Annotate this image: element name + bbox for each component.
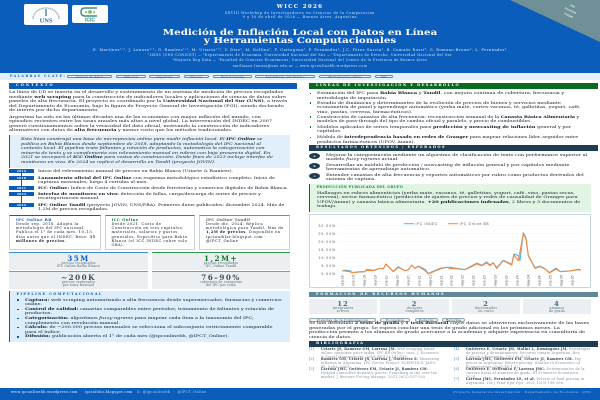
stat: integrantes: Integrantes bbox=[332, 306, 354, 310]
panel: contexto heading: CONTEXTO bbox=[16, 83, 54, 87]
callout: IPC Online: contexto local. El pipeline trata faltantes y rotación de productos, automatiza la categorización con bbox=[20, 145, 264, 150]
panel: formación de recursos humanos heading bbox=[309, 292, 598, 297]
card: IPC Online Tandil: ipctandilar.blogspot.com · bbox=[206, 235, 266, 239]
timeline 2014 bbox=[9, 169, 34, 173]
list: líneas de investigación: Módulo de interdependencia basado en redes de Granger para mapear relaciones líder–seguidor entre bbox=[317, 134, 578, 139]
logo: UNS bbox=[24, 4, 68, 25]
stat: 200K: ~200K bbox=[61, 273, 96, 282]
line chart: IPC INDEC vs IPC Online BB: may-20 bbox=[396, 274, 400, 286]
corner ribbon: Provincia bbox=[564, 6, 577, 15]
title: Medición de Inflación Local con Datos en Línea bbox=[163, 28, 437, 38]
panel: resultados heading: RESULTADOS OBTENIDOS / ESPERADOS bbox=[316, 145, 446, 149]
line chart: IPC INDEC vs IPC Online BB bbox=[309, 214, 591, 288]
bibliography right column: de precios y determinantes: Sectores tomate Argentina. Rev. bbox=[466, 351, 580, 355]
corner ribbon: Ciudad bbox=[563, 11, 574, 19]
footer bbox=[0, 388, 600, 400]
panel: bibliografía heading: BIBLIOGRAFÍA bbox=[316, 341, 364, 345]
results list: Mejorar la categorización mediante un algoritmo de clasificación de texto con performance superior al bbox=[326, 152, 587, 157]
bibliography right column: Larrosa JMC, Fernández LE, et al. Drivers of food pricing in bbox=[466, 377, 584, 381]
panel: producción publicada bbox=[309, 184, 591, 212]
list: líneas de investigación: Estimación del IPC para Bahía Blanca y Tandil, con mejora continua de cobertura, frecuencia y bbox=[317, 90, 564, 95]
text: [4] bbox=[454, 347, 459, 351]
line chart: IPC INDEC vs IPC Online BB: sep-22 bbox=[472, 275, 476, 285]
keyword pills: Precios bbox=[190, 75, 203, 79]
stat: alumnos: 4 bbox=[554, 300, 560, 308]
affiliations: ⁴Mayoría Reg Data — ⁵Facultad de Ciencias Económicas, Universidad Nacional del Centro de la Provincia de Buenos Aires bbox=[173, 58, 427, 62]
line chart: IPC INDEC vs IPC Online BB: IPC INDEC bbox=[416, 221, 438, 225]
timeline 2018 bbox=[9, 176, 34, 180]
line chart: IPC INDEC vs IPC Online BB: may-24 bbox=[527, 274, 531, 286]
card: ICC Online: Desde 2021. Costo de bbox=[112, 222, 161, 226]
panel: formación de recursos humanos heading: FORMACIÓN DE RECURSOS HUMANOS bbox=[316, 292, 445, 296]
text: contexto paragraph 1: paneles de alta frecuencia. El proyecto es coordinado por la Universidad Nacional del Sur (UNS), a través bbox=[9, 98, 287, 103]
stat: 1.2M: 1,2M+ bbox=[204, 254, 238, 263]
line chart: IPC INDEC vs IPC Online BB: ene-19 bbox=[352, 275, 356, 285]
text: [1] bbox=[309, 347, 314, 351]
list: líneas de investigación bbox=[317, 90, 581, 144]
keyword pills: IPC bbox=[381, 75, 387, 79]
bibliography left column: Hedged controlled domestic prices: Searching in the over-tax bbox=[321, 371, 437, 375]
card: ICC Online: Blanca (el ICC INDEC cubre solo bbox=[112, 239, 187, 243]
panel: pipeline computacional bbox=[9, 291, 290, 342]
pipeline list: Categorización: algoritmos fuzzy-ngrams para mapear cada ítem a la taxonomía del IPC; bbox=[25, 315, 254, 320]
text: contexto paragraph 1: de interés por dicho departamento. bbox=[9, 107, 99, 112]
line chart: IPC INDEC vs IPC Online BB: ene-22 bbox=[450, 275, 454, 285]
affiliations bbox=[148, 53, 452, 68]
pipeline heading: PIPELINE COMPUTACIONAL bbox=[16, 292, 103, 296]
text: formación bbox=[309, 320, 589, 339]
bibliography right column: Argentina. Int J Food Syst Dyn. 2021;12(3):198-206. bbox=[466, 381, 564, 385]
producción text: cerveza), sector farmacéutico (predicción de ajustes de precios y redes de causalidad de Granger para bbox=[316, 194, 577, 199]
card: IPC Online BB: días antes que el INDEC. Base: 35 bbox=[16, 235, 96, 239]
list: líneas de investigación: productos farmacéuticos (UPOV, Anmu). bbox=[317, 139, 415, 144]
keyword pills: Web Scraping bbox=[221, 75, 244, 79]
card: ICC Online: GBA). bbox=[112, 243, 125, 247]
corner ribbon: Año bbox=[569, 3, 576, 9]
bibliography right column: Ciencia y Economía. 2023;8:31-39. bbox=[466, 355, 531, 359]
logo: UNS: UNS bbox=[40, 18, 53, 24]
timeline: capturas mensuales, luego 4 corridas al mes. bbox=[38, 179, 148, 184]
line chart: IPC INDEC vs IPC Online BB: may-23 bbox=[494, 274, 498, 286]
line chart: IPC INDEC vs IPC Online BB: ene-24 bbox=[516, 275, 520, 285]
logo: ICIC bbox=[72, 5, 108, 22]
card: ICC Online: generales. Específico para Bahía bbox=[112, 235, 187, 239]
stat: integrantes: activos bbox=[337, 309, 349, 313]
line chart: IPC INDEC vs IPC Online BB: may-21 bbox=[429, 274, 433, 286]
bibliography right column: Larrosa JMC, Gutiérrez EM, Uriarte JI, Ramírez GM. Pay bbox=[466, 357, 581, 361]
results list: Extender canastas de alta frecuencia y reportes automáticos por rubro como productos derivados del bbox=[326, 172, 584, 177]
stat: integrantes bbox=[309, 299, 377, 314]
line chart: IPC INDEC vs IPC Online BB: sep-18 bbox=[341, 275, 345, 285]
line chart: IPC INDEC vs IPC Online BB: may-19 bbox=[363, 274, 367, 286]
stat: doctorandos: 2 bbox=[483, 300, 489, 308]
results list bbox=[309, 152, 588, 181]
line chart: IPC INDEC vs IPC Online BB: ene-20 bbox=[385, 275, 389, 285]
card: IPC Online Tandil: 1,2M de precios. Disponible en bbox=[206, 230, 281, 234]
title: y Herramientas Computacionales bbox=[204, 36, 396, 46]
bibliography right column: Gutiérrez E, Uriarte JM, Molini L, Domínguez JM. Estrategias bbox=[466, 347, 591, 351]
card: IPC Online BB: millones de precios. bbox=[16, 239, 66, 243]
discipline pills: Derecho bbox=[419, 318, 434, 322]
card: IPC Online Tandil: metodológica para Tandil. Más de bbox=[206, 226, 284, 230]
timeline 2018: 2018 bbox=[17, 176, 26, 180]
text: formación: generadas por el grupo. Se espera concluir una tesis de grado adicional en los próximos meses. La bbox=[309, 325, 560, 330]
text: [7] bbox=[454, 377, 459, 381]
header banner bbox=[0, 0, 600, 73]
panel: resultados heading bbox=[309, 145, 598, 151]
bibliography left column: Ramírez GM, Uriarte JS, Larrosa J, Gutiérrez E. Measuring bbox=[321, 357, 439, 361]
keywords label: PALABRAS CLAVE: bbox=[10, 74, 66, 78]
pipeline list: complemento con revolución manual. bbox=[25, 320, 120, 325]
stat: 1.2M: precios recopilados bbox=[204, 261, 238, 265]
timeline 2021: 2021 bbox=[17, 186, 26, 190]
timeline 2023 bbox=[9, 192, 34, 196]
pipeline list: Control de calidad: canastas comparables entre períodos; tratamiento de faltantes y rotación de bbox=[25, 306, 274, 311]
stat: coverage bbox=[152, 271, 290, 289]
line chart: IPC INDEC vs IPC Online BB: may-25 bbox=[560, 274, 564, 286]
results list: herramientas de aprendizaje automático. bbox=[326, 166, 430, 171]
panel: líneas de investigación heading: LÍNEAS DE INVESTIGACIÓN Y DESARROLLO bbox=[316, 83, 460, 87]
line chart: IPC INDEC vs IPC Online BB: 30,00% bbox=[319, 223, 336, 227]
stat: doctorandos: en curso bbox=[478, 309, 494, 313]
text: [6] bbox=[454, 367, 459, 371]
bibliography right column: Gutiérrez E, Delfranco F, Larrosa JMC. Determinantes de la bbox=[466, 367, 585, 371]
text: formación: producción permite a los alumnos de grado acercarse a la academia y adquirir experiencia en consultoría de bbox=[309, 329, 585, 334]
card: IPC Online BB bbox=[9, 215, 101, 250]
keyword pills: Argentina bbox=[156, 75, 173, 79]
pipeline list: Captura: web scraping automatizado a alta frecuencia desde supermercados, farmacias y comercios bbox=[25, 297, 282, 302]
bibliography left column: online consumer price index. IPC BB Online: caso. J. Economic bbox=[321, 351, 439, 355]
line chart: IPC INDEC vs IPC Online BB: sep-20 bbox=[407, 275, 411, 285]
panel: contexto heading bbox=[9, 83, 297, 89]
timeline 2014: 2014 bbox=[17, 169, 26, 173]
stat: coverage: del IPC por toma bbox=[206, 283, 236, 287]
stat: doctorandos: doctorandos bbox=[475, 306, 497, 310]
text: contexto paragraph 1: mediante web scraping para la construcción de indicadores locales y aplicaciones de ciencia de datos sobre bbox=[9, 94, 286, 99]
list: líneas de investigación: Estudio de dinámicas y determinantes de la evolución de precios de bienes y servicios mediante bbox=[317, 100, 561, 105]
text: formación: ciencia de datos. bbox=[309, 334, 352, 339]
callout: IPC Online: monitoreo en vivo. En 2024 se replicó el desarrollo en Tandil (proyecto JOVIN). bbox=[20, 159, 215, 164]
conference details: XXVIII Workshop de Investigadores en Ciencias de la Computación bbox=[225, 11, 375, 15]
list: líneas de investigación: Construcción de canastas de alta frecuencia: reconstrucción semanal de la Canasta Básica Alimentaria y bbox=[317, 114, 579, 119]
text: contexto paragraph 1 bbox=[9, 89, 287, 112]
text: contexto paragraph 2: episodios recientes entre las tasas anuales más altas a nivel global. La intervención del INDEC en 2007 bbox=[9, 118, 272, 123]
timeline: recategorización manual. bbox=[38, 195, 100, 200]
bibliography left column bbox=[309, 347, 440, 379]
text: [3] bbox=[309, 367, 314, 371]
discipline pills: Reforma bbox=[446, 318, 461, 322]
stat: doctores: 2 bbox=[412, 300, 417, 308]
line chart: IPC INDEC vs IPC Online BB: 5,00% bbox=[322, 264, 336, 268]
stat: 35M: IPC Online Bahía Blanca bbox=[57, 264, 100, 268]
affiliations: ¹IIESS (UNS-CONICET) — ²Departamento de Economía, Universidad Nacional del Sur — ³Departamento de Derecho, Universidad Nacional del Sur bbox=[148, 53, 452, 57]
line chart: IPC INDEC vs IPC Online BB: ene-23 bbox=[483, 275, 487, 285]
stat: 1.2M bbox=[152, 252, 290, 270]
list: líneas de investigación: modelos de pass-through del tipo de cambio oficial y paralelo, y precio de combustibles. bbox=[317, 118, 531, 123]
producción text: Hallazgos en rubros alimenticios (yerba mate, vacunos, té, galletitas, yogurt, café, vino, pastas secas, bbox=[316, 190, 574, 195]
timeline: Lanzamiento oficial del IPC Online con esquema metodológico estadístico completo. Inicio de bbox=[38, 175, 275, 180]
results list: c bbox=[314, 174, 315, 178]
card: IPC Online BB: metodología del IPC nacional. bbox=[16, 226, 85, 230]
pipeline list: online. bbox=[25, 301, 42, 306]
stat: 35M: 35M bbox=[67, 254, 90, 263]
line chart: IPC INDEC vs IPC Online BB: 15,00% bbox=[319, 248, 336, 252]
discipline pills: Ciencias de la Computación bbox=[317, 318, 368, 322]
text: [2] bbox=[309, 357, 314, 361]
bibliography right column: 2024. bbox=[466, 375, 477, 379]
line chart: IPC INDEC vs IPC Online BB: sep-24 bbox=[538, 275, 542, 285]
bibliography left column: Uriarte JS, Ramírez GM, Larrosa JM. Web scraping based bbox=[321, 347, 435, 351]
corner ribbon bbox=[510, 0, 600, 42]
line chart: IPC INDEC vs IPC Online BB: IPC Online BB bbox=[460, 221, 490, 225]
list: líneas de investigación: capítulos. bbox=[317, 128, 342, 133]
bibliography left column: market. J Reviews Pricing Manage. 2021;20(3):197-203. bbox=[321, 375, 427, 379]
text: contexto paragraph 1: del Departamento de Economía, bajo la figura de Proyecto General de Investigación (PGI), siendo declarado bbox=[9, 103, 284, 108]
keyword pills: Inflación bbox=[124, 75, 138, 79]
conference name: WICC 2026 bbox=[277, 4, 323, 10]
card: ICC Online: ICC Online bbox=[112, 218, 139, 222]
bibliography left column: 48. Salta; 2019. bbox=[321, 365, 351, 369]
callout: IPC Online: minería de texto y se complementa con relevamiento manual en rubros con baja presencia digital. En bbox=[20, 150, 270, 155]
list: líneas de investigación: metodología de imputación. bbox=[317, 95, 388, 100]
callout: IPC Online: 2021 se incorporó el ICC Online para costos de construcción. Desde fines de 2023 incluye interfaz de bbox=[20, 154, 272, 159]
line chart: IPC INDEC vs IPC Online BB: sep-23 bbox=[505, 275, 509, 285]
list: líneas de investigación: Modelos aplicados de series temporales para predicción y nowcasting de inflación general y por bbox=[317, 124, 571, 129]
stat: 35M bbox=[9, 252, 148, 270]
results list: sistema de captura. bbox=[326, 176, 376, 181]
keyword pills: Ciencia de datos bbox=[76, 75, 103, 79]
card: ICC Online: materiales, salarios y gastos bbox=[112, 230, 178, 234]
timeline 2021 bbox=[9, 186, 34, 190]
stat: alumnos bbox=[523, 299, 591, 314]
pipeline list: productos. bbox=[25, 310, 52, 315]
footer credit: Proyecto General de Investigación · Departamento de Economía · UNS bbox=[453, 390, 591, 394]
card: IPC Online Tandil: IPC Online Tandil bbox=[206, 218, 250, 222]
stat: 35M: precios recopilados bbox=[61, 261, 96, 265]
timeline bbox=[9, 168, 288, 211]
bibliography right column: prices in Argentina: Hetero-pricing. Studies in Economics of bbox=[466, 361, 580, 365]
card: ICC Online bbox=[104, 215, 195, 250]
line chart: IPC INDEC vs IPC Online BB: sep-25 bbox=[571, 275, 575, 285]
callout: IPC Online: publica en Bahía Blanca desde septiembre de 2018, adaptando la metodología del IPC nacional al bbox=[20, 141, 260, 146]
line chart: IPC INDEC vs IPC Online BB: sep-19 bbox=[374, 275, 378, 285]
text: [5] bbox=[454, 357, 459, 361]
timeline: 1,2M de precios recopilados. bbox=[38, 206, 108, 211]
results list: a bbox=[314, 154, 315, 158]
card: IPC Online BB: IPC Online BB bbox=[16, 218, 52, 222]
authors: E. Martínez¹˒², J. Lanusa¹˒², G. Ramírez¹˒², M. Uriarte¹˒², V. Diez², M. Nollino², F. Cartagena², P. Fernández², J.C. Pérez García², B. Camaño Rossi², G. Romano-Brown², L. Fernández² bbox=[93, 48, 507, 52]
timeline: Interfaz de monitoreo en vivo: detección de fallas, carga/descarga de series de precios y bbox=[38, 191, 261, 196]
producción text: trabajo. bbox=[316, 203, 336, 208]
text: contexto paragraph 2: generó cuestionamientos sobre la veracidad del dato oficial, motivando la construcción de indicadores bbox=[9, 123, 269, 128]
producción heading: PRODUCCIÓN PUBLICADA DEL GRUPO bbox=[316, 185, 403, 189]
bibliography right column bbox=[454, 347, 591, 385]
stat: alumnos: de grado bbox=[549, 309, 565, 313]
stat: coverage: 76–90% bbox=[201, 273, 241, 282]
stat: 1.2M: IPC Online Tandil bbox=[206, 264, 236, 268]
conference details: 9 y 10 de abril de 2026 — Buenos Aires, Argentina bbox=[243, 15, 357, 19]
card: ICC Online: Construcción en tres capítulos: bbox=[112, 226, 184, 230]
callout: IPC Online: Esta línea construyó una base de microprecios online para medir inflación local. El IPC Online se bbox=[20, 136, 262, 141]
panel: bibliografía heading bbox=[309, 341, 598, 347]
discipline pills: Economía bbox=[386, 318, 404, 322]
pipeline list: Cálculo: de ~200.000 precios mensuales se selecciona el subconjunto estrictamente comparable bbox=[25, 324, 273, 329]
line chart: IPC INDEC vs IPC Online BB: sep-21 bbox=[440, 275, 444, 285]
conference details bbox=[225, 11, 375, 19]
timeline 2024: 2024 bbox=[17, 203, 26, 207]
affiliations: emilianoe.lanusa@uns.edu.ar — www.ipconlinebb.wordpress.com bbox=[233, 64, 367, 68]
callout: IPC Online bbox=[9, 135, 290, 168]
stat: 200K: precios capturados bbox=[62, 280, 95, 284]
stat: doctorandos bbox=[452, 299, 520, 314]
timeline 2023: 2023 bbox=[17, 192, 26, 196]
producción text bbox=[316, 190, 580, 208]
line chart: IPC INDEC vs IPC Online BB: 25,00% bbox=[319, 231, 336, 235]
bibliography right column: Econometrics. 2021;48:1-13. bbox=[466, 365, 520, 369]
bibliography left column: Larrosa JMC, Gutiérrez EM, Uriarte JI, Ramírez GM. bbox=[321, 367, 428, 371]
stat: 200K: por toma mensual bbox=[63, 283, 94, 287]
stat: coverage: cobertura de categorías bbox=[200, 280, 242, 284]
line chart: IPC INDEC vs IPC Online BB: 10,00% bbox=[319, 256, 336, 260]
text: formación: Se han defendido 2 tesis de grado y 1 tesis doctoral cuyos datos se obtuvieron exclusivamente de las bases bbox=[309, 320, 589, 325]
footer links: www.ipconlinebb.wordpress.com · ipcinfobo.blogspot.com X: @ipconlinebb · @IPCT_Online bbox=[11, 390, 207, 394]
line chart: IPC INDEC vs IPC Online BB: 0,00% bbox=[322, 272, 336, 276]
keyword pills: Aprendizaje automático bbox=[265, 75, 305, 79]
stat: 200K bbox=[9, 271, 148, 289]
stat: integrantes: 12 bbox=[337, 300, 349, 308]
panel: líneas de investigación heading bbox=[309, 83, 598, 89]
pipeline list bbox=[25, 297, 282, 338]
results list: b bbox=[313, 164, 316, 168]
card: IPC Online BB: Publica el 1° de cada mes, 10–15 bbox=[16, 230, 92, 234]
text: contexto paragraph 1: La línea de I/D se inserta en el desarrollo y sostenimiento de un sistema de medición de precios recopilados bbox=[9, 89, 283, 94]
bibliography right column: carrera hasta el alumnos de grado. El Trimestre Económico. bbox=[466, 371, 580, 375]
bibliography left column: inflation in Argentina. IFC Online Project. SCIENTICS, JAIIO bbox=[321, 361, 436, 365]
card: IPC Online Tandil: Desde dic. 2024. Réplica bbox=[206, 222, 263, 226]
bibliography left column: & Social Measurement. 2019;44(4-5):141-159. bbox=[321, 355, 408, 359]
text: contexto paragraph 2 bbox=[9, 114, 272, 132]
card: IPC Online Tandil bbox=[199, 215, 290, 250]
keywords band bbox=[0, 73, 600, 80]
timeline: IPC Online Tandil (proyecto JOVIN, UNS/PBA). Primeros datos publicados: diciembre 2024. Más de bbox=[38, 202, 284, 207]
results list: modelo fuzzy-ngrams actual. bbox=[326, 156, 399, 161]
stat: doctores: doctores bbox=[407, 306, 422, 310]
timeline: Inicio del relevamiento manual de precios en Bahía Blanca (Uriarte & Ramírez). bbox=[38, 168, 233, 173]
stat: doctores bbox=[380, 299, 449, 314]
line chart: IPC INDEC vs IPC Online BB: ene-21 bbox=[418, 275, 422, 285]
card: IPC Online Tandil: @IPCT_Online bbox=[206, 239, 238, 243]
list: líneas de investigación: vino, pastas, cerveza, farmacéuticos). bbox=[317, 109, 412, 114]
timeline 2024 bbox=[9, 203, 34, 207]
keyword pills bbox=[67, 75, 393, 79]
text: contexto paragraph 2: Argentina ha sido en las últimas décadas una de las economías con mayor inflación del mundo, con bbox=[9, 114, 261, 119]
line chart: IPC INDEC vs IPC Online BB: 20,00% bbox=[319, 239, 336, 243]
text: contexto paragraph 2: alternativos con datos de alta frecuencia y menor costo que los métodos tradicionales. bbox=[9, 127, 233, 132]
stat: alumnos: alumnos bbox=[549, 306, 564, 310]
discipline pills bbox=[309, 318, 465, 322]
timeline: ICC Online: Índice de Costo de Construcción desde ferreterías y comercios digitales de Bahía Blanca. bbox=[38, 185, 288, 190]
keyword pills: Microprecios online bbox=[328, 75, 362, 79]
stat: doctores: completos bbox=[405, 309, 424, 313]
producción text: UPOV/Anmu) y canasta básica alimentaria. +20 publicaciones indexadas, 2 libros y 3 documentos de bbox=[316, 198, 580, 204]
line chart: IPC INDEC vs IPC Online BB: ene-25 bbox=[549, 275, 553, 285]
card: IPC Online BB: Desde sep. 2018. Adapta la bbox=[16, 222, 79, 226]
pipeline list: para el índice. bbox=[25, 329, 61, 334]
title bbox=[163, 28, 438, 46]
results list: Desarrollar un módulo de predicción / nowcasting de inflación general y por capítulos mediante bbox=[326, 162, 569, 167]
line chart: IPC INDEC vs IPC Online BB: may-22 bbox=[461, 274, 465, 286]
pipeline list: Difusión: publicación abierta el 1° de cada mes (@ipconlinebb, @IPCT_Online). bbox=[25, 333, 229, 338]
list: líneas de investigación: econometría de panel y aprendizaje automático (yerba mate, cortes vacunos, té, galletitas, yogurt, café, bbox=[317, 104, 581, 109]
